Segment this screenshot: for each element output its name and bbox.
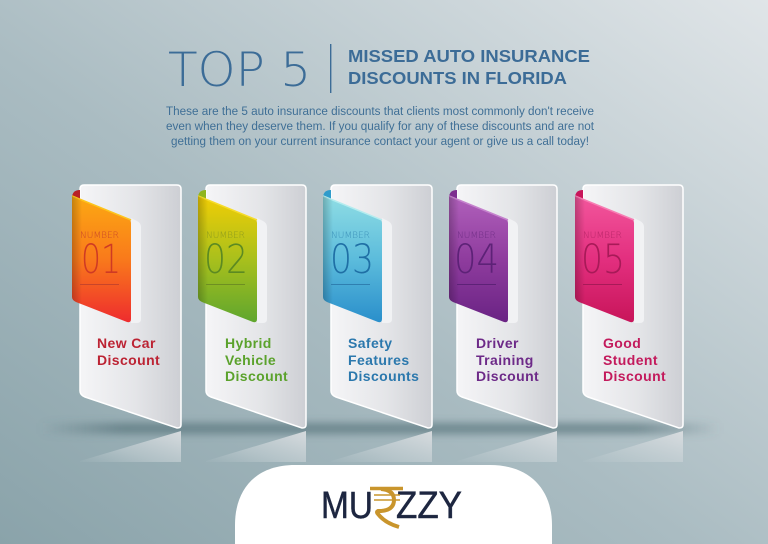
logo: Muzzy: ZZY: [396, 485, 462, 527]
label 01: New Car: [97, 335, 156, 351]
panel: discount 02: [198, 185, 306, 428]
logo: Muzzy: MU: [321, 485, 373, 527]
floor shadow: [40, 423, 720, 434]
subtitle: MISSED AUTO INSURANCE: [348, 46, 590, 66]
icon: rupee sign: [370, 488, 403, 527]
title divider: [330, 44, 331, 93]
intro text: getting them on your current insurance contact your agent or give us a call today!: [171, 134, 589, 148]
reflection 02: [206, 431, 306, 462]
panel: discount 01: NUMBER: [80, 231, 119, 241]
ribbon 05: [575, 190, 583, 204]
intro text: even when they deserve them. If you qualify for any of these discounts and are not: [166, 119, 595, 133]
label 02: Discount: [225, 368, 288, 384]
subtitle: DISCOUNTS IN FLORIDA: [348, 68, 567, 88]
panel: discount 03: [323, 185, 432, 428]
panel: discount 04: [449, 185, 557, 428]
panel: discount 04: NUMBER: [457, 231, 496, 241]
logo panel: [235, 465, 552, 544]
label 02: Vehicle: [225, 352, 276, 368]
logo: Muzzy: [321, 485, 462, 527]
reflection 05: [583, 431, 683, 462]
panel: discount 04: 04: [454, 237, 499, 283]
label 04: Discount: [476, 368, 539, 384]
ribbon 03: [323, 190, 331, 204]
reflection 03: [331, 431, 432, 462]
panel: discount 02: 02: [204, 237, 248, 283]
label 05: Student: [603, 352, 658, 368]
ribbon 02: [198, 190, 206, 204]
panel: discount 03: 03: [330, 237, 374, 283]
ribbon 01: [72, 190, 80, 204]
label 05: Discount: [603, 368, 666, 384]
panel: discount 03: NUMBER: [331, 231, 370, 241]
label 03: Discounts: [348, 368, 419, 384]
label 03: Safety: [348, 335, 392, 351]
panel: discount 01: 01: [81, 237, 121, 283]
panel: discount 02: NUMBER: [206, 231, 245, 241]
label 05: Good: [603, 335, 641, 351]
intro text: [166, 104, 595, 148]
reflection 01: [80, 431, 181, 462]
label 02: Hybrid: [225, 335, 272, 351]
ribbon 04: [449, 190, 457, 204]
reflection 04: [457, 431, 557, 462]
panel: discount 05: [575, 185, 683, 428]
subtitle: [348, 46, 590, 88]
label 03: Features: [348, 352, 410, 368]
title: TOP 5: TOP 5: [168, 43, 311, 98]
panel: discount 05: 05: [581, 237, 625, 283]
label 04: Training: [476, 352, 534, 368]
panel: discount 05: NUMBER: [583, 231, 622, 241]
label 01: Discount: [97, 352, 160, 368]
intro text: These are the 5 auto insurance discounts that clients most commonly don't receive: [166, 104, 594, 118]
panel: discount 01: [72, 185, 181, 428]
label 04: Driver: [476, 335, 519, 351]
